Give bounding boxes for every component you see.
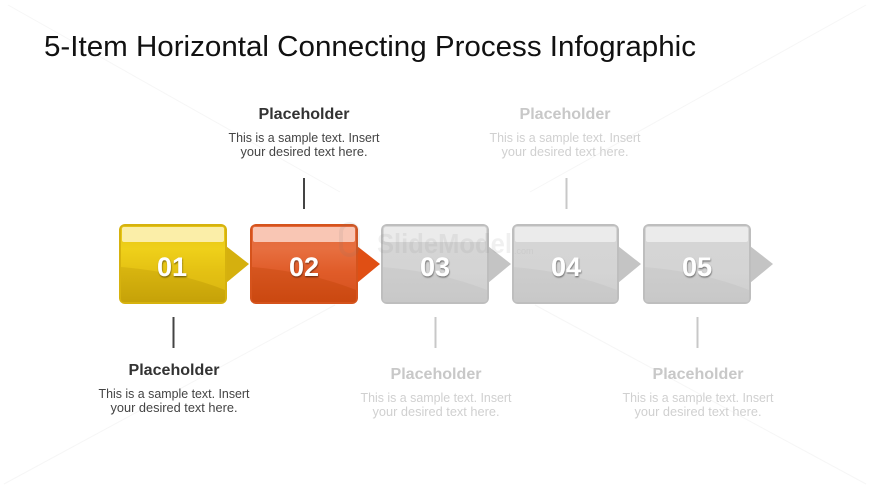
text block: step 1: Placeholder [128, 362, 220, 379]
text block: step 5: your desired text here. [634, 405, 762, 419]
text block: step 5 [622, 366, 774, 419]
step 4: grey box: 04 [551, 252, 581, 282]
connector: step 4 [566, 178, 568, 209]
step 1: yellow box: 01 [157, 252, 187, 282]
watermark logo: .com [514, 246, 534, 256]
text block: step 1: This is a sample text. Insert [98, 387, 250, 401]
step 5: grey box: 05 [682, 252, 712, 282]
connector: step 5 [696, 317, 698, 348]
text block: step 1: your desired text here. [110, 401, 238, 415]
text block: step 5: This is a sample text. Insert [622, 391, 774, 405]
step 5: grey box [643, 224, 773, 304]
step 3: grey box: 03 [420, 252, 450, 282]
connector: step 2 [303, 178, 305, 209]
connector: step 3 [434, 317, 436, 348]
text block: step 3: This is a sample text. Insert [360, 391, 512, 405]
text block: step 4: This is a sample text. Insert [490, 131, 641, 145]
text block: step 2: This is a sample text. Insert [228, 131, 380, 145]
connector: step 1 [172, 317, 174, 348]
text block: step 2 [228, 106, 380, 159]
text block: step 2: Placeholder [258, 106, 350, 123]
text block: step 3 [360, 366, 512, 419]
step 2: orange box: 02 [289, 252, 319, 282]
text block: step 4: your desired text here. [502, 145, 628, 159]
title: 5-Item Horizontal Connecting Process Infographic [44, 31, 696, 63]
text block: step 3: your desired text here. [372, 405, 500, 419]
text block: step 1 [98, 362, 250, 415]
text block: step 4 [490, 106, 641, 159]
text block: step 3: Placeholder [390, 366, 482, 383]
watermark logo: SlideModel [377, 228, 512, 259]
text block: step 5: Placeholder [652, 366, 744, 383]
watermark logo [341, 224, 534, 259]
text block: step 2: your desired text here. [240, 145, 368, 159]
step 4: grey box [512, 224, 641, 304]
step 2: orange box [250, 224, 380, 304]
step 3: grey box [381, 224, 511, 304]
step 1: yellow box [119, 224, 249, 304]
text block: step 4: Placeholder [520, 106, 610, 123]
